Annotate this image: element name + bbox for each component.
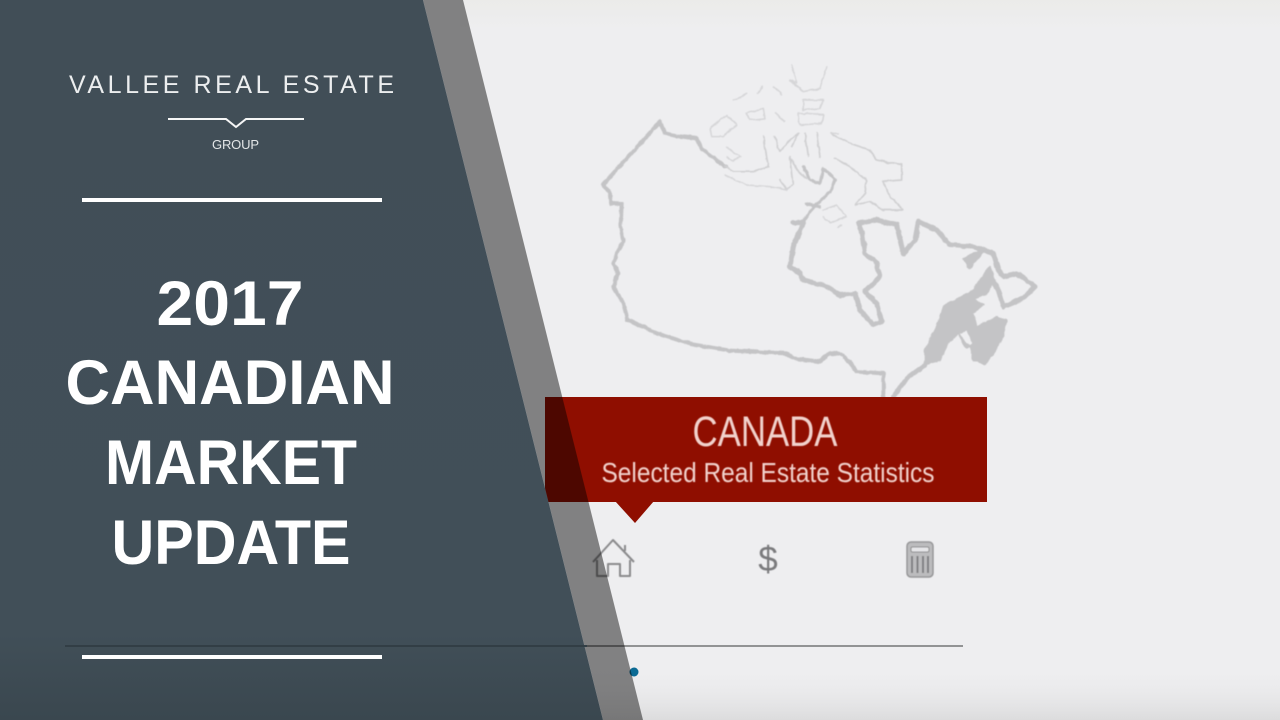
headline: CANADIAN [66, 348, 394, 418]
icon: calculator [907, 542, 933, 577]
logo [69, 71, 394, 152]
banner pointer [615, 501, 654, 523]
map: Arctic coast and islands [803, 167, 835, 222]
dark slate diagonal panel [0, 0, 603, 720]
timeline dot [630, 668, 638, 676]
bottom white rule [82, 655, 382, 659]
map of Canada outline [603, 65, 1035, 397]
timeline rule [65, 645, 963, 647]
icon: house [593, 540, 634, 576]
logo wordmark: VALLEE REAL ESTATE [69, 71, 394, 99]
icon: dollar sign: $ [758, 540, 778, 579]
headline [66, 269, 394, 578]
headline: 2017 [156, 269, 304, 339]
logo group label: GROUP [212, 137, 259, 152]
map: western and southern mainland border [603, 122, 883, 397]
top white rule [82, 198, 382, 202]
red banner: Canada [545, 397, 987, 523]
map: Hudson Bay and Quebec coast [790, 220, 1035, 325]
banner heading: CANADA [692, 408, 838, 456]
logo chevron rule [168, 119, 304, 127]
headline: UPDATE [112, 508, 350, 578]
headline: MARKET [105, 428, 357, 498]
translucent grey diagonal band [423, 0, 643, 720]
banner subtitle: Selected Real Estate Statistics [602, 457, 934, 488]
map: St Lawrence and Maritimes [925, 267, 1007, 365]
